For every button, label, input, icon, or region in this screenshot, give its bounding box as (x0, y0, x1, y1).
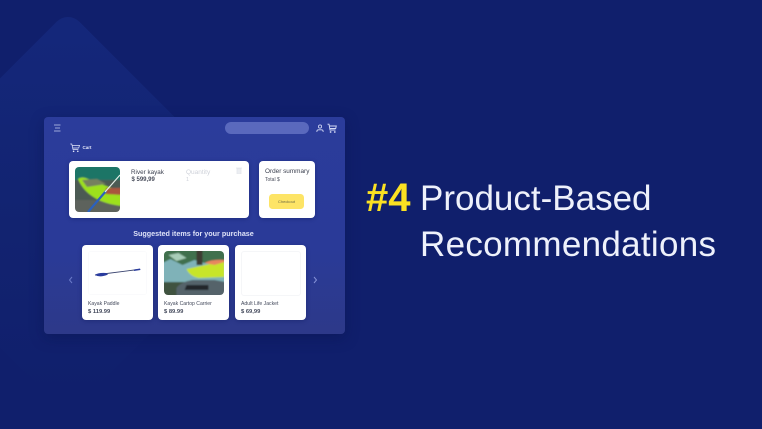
icon: user (316, 124, 324, 132)
image placeholder: blank (241, 251, 301, 296)
image: paddle (88, 251, 147, 295)
icon: top cart (328, 124, 337, 133)
icon: left arrow (69, 276, 72, 284)
search bar (225, 122, 309, 134)
panel: cart item card (69, 161, 249, 218)
icon: right arrow (314, 276, 317, 284)
checkout button: Checkout (278, 198, 295, 204)
quantity value: 1 (186, 176, 189, 182)
product price: $ 599,99 (132, 176, 155, 182)
icon: cart heading (70, 144, 80, 152)
total label: Total $ (265, 177, 280, 183)
product price: $ 69,99 (241, 309, 260, 315)
icon: hamburger menu (54, 124, 60, 132)
product card: kayak paddle (82, 245, 153, 320)
product name: Kayak Cartop Carrier (164, 300, 212, 306)
checkout button (269, 194, 304, 208)
title line 2: Recommendations (420, 224, 716, 264)
title line 1: Product-Based (420, 179, 652, 218)
panel: shop window mockup (44, 117, 345, 334)
product name: River kayak (131, 168, 164, 176)
product price: $ 119.99 (88, 309, 110, 315)
suggested items heading: Suggested items for your purchase (133, 229, 254, 238)
order summary heading: Order summary (265, 168, 309, 174)
panel: order summary card (259, 161, 315, 218)
cart label: Cart (82, 145, 92, 150)
product price: $ 89.99 (164, 309, 183, 315)
image: green river kayak (75, 167, 120, 212)
title (366, 176, 716, 264)
title number: #4 (366, 176, 410, 220)
product name: Kayak Paddle (88, 300, 119, 306)
image: kayak on car roof (164, 251, 224, 295)
product card: adult life jacket (235, 245, 306, 320)
product card: kayak cartop carrier (158, 245, 229, 320)
icon: trash (236, 168, 242, 174)
quantity label: Quantity (186, 168, 210, 176)
product name: Adult Life Jacket (241, 300, 278, 306)
